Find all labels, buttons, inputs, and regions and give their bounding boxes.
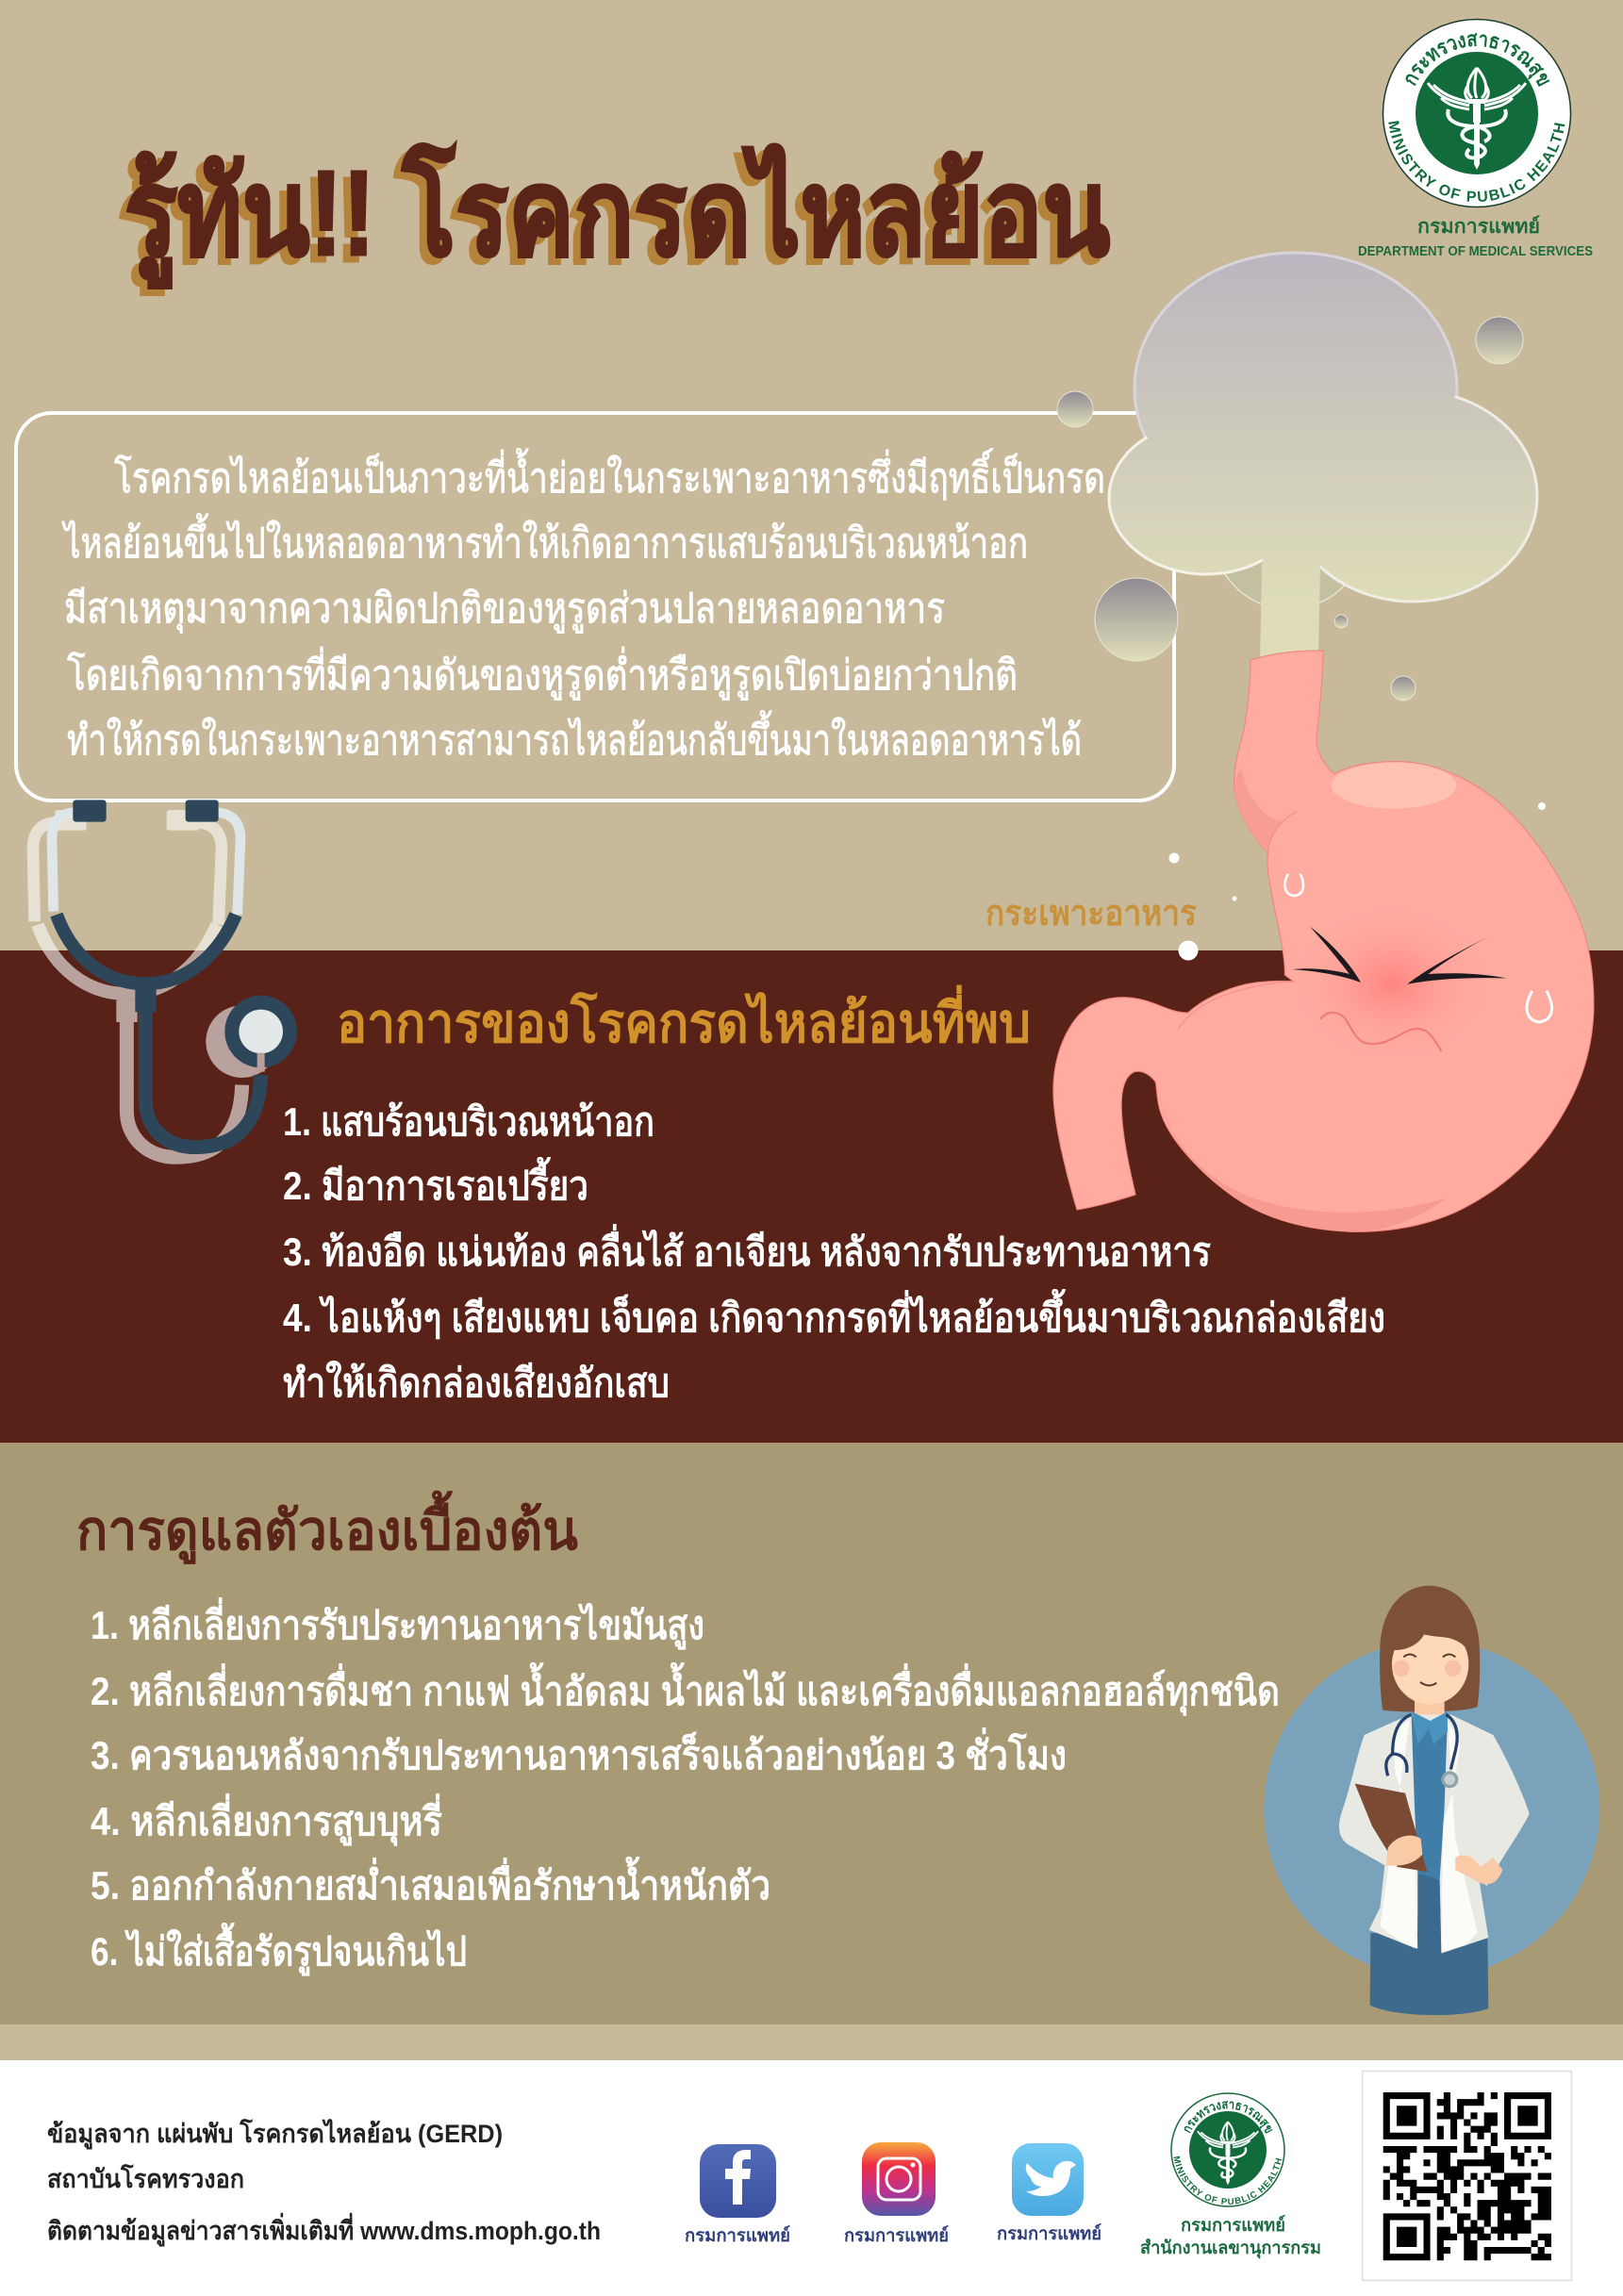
footer credits text: สถาบันโรคทรวงอก	[47, 2163, 244, 2193]
panel: intro text box	[16, 413, 1174, 801]
icon: stethoscope	[33, 800, 297, 1157]
self-care list: 4. หลีกเลี่ยงการสูบบุหรี่	[91, 1793, 442, 1846]
logo: ministry of public health	[1358, 19, 1593, 259]
intro paragraph	[62, 448, 1105, 764]
footer logo: ministry of public health: กระทรวงสาธารณสุข	[1184, 2101, 1273, 2134]
footer credits text: ข้อมูลจาก แผ่นพับ โรคกรดไหลย้อน (GERD)	[47, 2118, 503, 2150]
title: รู้ทัน!! โรคกรดไหลย้อน	[124, 142, 1110, 289]
icon: stomach character	[1053, 651, 1594, 1231]
doctor shirt	[1412, 1714, 1448, 1879]
symptoms list	[283, 1099, 1385, 1405]
band: footer background	[0, 2060, 1623, 2296]
doctor neck	[1415, 1688, 1445, 1723]
doctor skirt	[1370, 1933, 1488, 2015]
footer logo emblem	[1198, 2122, 1258, 2185]
self-care list: 3. ควรนอนหลังจากรับประทานอาหารเสร็จแล้วอย่างน้อย 3 ชั่วโมง	[91, 1727, 1067, 1777]
icon: doctor	[1264, 1586, 1599, 2015]
self-care list: 5. ออกกำลังกายสม่ำเสมอเพื่อรักษาน้ำหนักตัว	[91, 1856, 770, 1908]
symptoms list: 1. แสบร้อนบริเวณหน้าอก	[283, 1099, 654, 1144]
intro paragraph: โดยเกิดจากการที่มีความดันของหูรูดต่ำหรือหูรูดเปิดบ่อยกว่าปกติ	[67, 646, 1018, 701]
sweat drops	[1284, 874, 1303, 896]
self-care list: 1. หลีกเลี่ยงการรับประทานอาหารไขมันสูง	[91, 1597, 704, 1650]
stethoscope shadow	[33, 810, 278, 1157]
logo label thai: กรมการแพทย์	[1417, 215, 1540, 238]
icon: white dots	[1169, 802, 1546, 960]
symptoms list: ทำให้เกิดกล่องเสียงอักเสบ	[283, 1360, 670, 1405]
doctor collar	[1412, 1711, 1448, 1744]
doctor lapels	[1380, 1719, 1478, 1952]
icon: facebook	[685, 2144, 790, 2246]
footer logo: ministry of public health: สำนักงานเลขานุการกรม	[1140, 2238, 1321, 2259]
symptoms list: 2. มีอาการเรอเปรี้ยว	[283, 1156, 588, 1208]
stomach right eye	[1407, 933, 1507, 984]
footer logo: ministry of public health: MINISTRY OF PUBLIC HEALTH	[1173, 2156, 1283, 2205]
doctor stethoscope	[1386, 1714, 1457, 1787]
stomach label: กระเพาะอาหาร	[985, 894, 1198, 933]
self-care list: 6. ไม่ใส่เสื้อรัดรูปจนเกินไป	[91, 1922, 467, 1976]
doctor backdrop circle	[1264, 1641, 1599, 1976]
icon: twitter	[997, 2143, 1101, 2244]
intro paragraph: มีสาเหตุมาจากความผิดปกติของหูรูดส่วนปลายหลอดอาหาร	[64, 586, 945, 634]
stomach highlight	[1332, 762, 1456, 809]
doctor fringe	[1382, 1587, 1479, 1662]
title: รู้ทัน!! โรคกรดไหลย้อน	[117, 149, 1102, 295]
icon: stomach smoke cloud	[1109, 253, 1537, 665]
band: symptoms background	[0, 950, 1623, 1443]
self-care list	[91, 1597, 1280, 1976]
stomach mouth	[1320, 1013, 1442, 1051]
stomach left eye	[1292, 927, 1361, 983]
icon: instagram	[844, 2142, 949, 2246]
heading: symptoms: อาการของโรคกรดไหลย้อนที่พบ	[337, 984, 1031, 1054]
logo: ministry of public health: MINISTRY OF PUBLIC HEALTH	[1388, 121, 1565, 202]
facebook label: กรมการแพทย์	[685, 2225, 790, 2246]
footer credits text	[47, 2118, 601, 2247]
band: self-care background	[0, 1443, 1623, 2024]
doctor cheeks and smile	[1393, 1654, 1461, 1685]
symptoms list: 4. ไอแห้งๆ เสียงแหบ เจ็บคอ เกิดจากกรดที่ไหลย้อนขึ้นมาบริเวณกล่องเสียง	[283, 1288, 1385, 1340]
logo label english: DEPARTMENT OF MEDICAL SERVICES	[1358, 244, 1593, 259]
footer logo: ministry of public health	[1140, 2092, 1321, 2259]
instagram label: กรมการแพทย์	[844, 2225, 949, 2246]
doctor hands	[1386, 1836, 1502, 1884]
doctor hair back	[1380, 1586, 1480, 1712]
intro paragraph: ทำให้กรดในกระเพาะอาหารสามารถไหลย้อนกลับขึ้นมาในหลอดอาหารได้	[67, 710, 1082, 764]
heading: self care: การดูแลตัวเองเบื้องต้น	[76, 1491, 578, 1564]
symptoms list: 3. ท้องอืด แน่นท้อง คลื่นไส้ อาเจียน หลังจากรับประทานอาหาร	[283, 1224, 1211, 1274]
footer credits text: ติดตามข้อมูลข่าวสารเพิ่มเติมที่ www.dms.moph.go.th	[47, 2212, 601, 2247]
footer logo label: กรมการแพทย์	[1181, 2215, 1285, 2236]
doctor coat	[1339, 1714, 1530, 1954]
twitter label: กรมการแพทย์	[997, 2223, 1101, 2244]
icon: bubbles	[1057, 317, 1523, 701]
doctor face	[1392, 1624, 1468, 1705]
intro paragraph: ไหลย้อนขึ้นไปในหลอดอาหารทำให้เกิดอาการแสบร้อนบริเวณหน้าอก	[62, 513, 1028, 567]
logo: ministry of public health: กระทรวงสาธารณสุข	[1405, 33, 1550, 87]
stomach blush	[1286, 901, 1498, 1065]
QR code	[1362, 2071, 1571, 2280]
intro paragraph: โรคกรดไหลย้อนเป็นภาวะที่น้ำย่อยในกระเพาะอาหารซึ่งมีฤทธิ์เป็นกรด	[114, 448, 1105, 502]
doctor clipboard	[1355, 1784, 1427, 1872]
logo emblem	[1428, 68, 1526, 170]
self-care list: 2. หลีกเลี่ยงการดื่มชา กาแฟ น้ำอัดลม น้ำผลไม้ และเครื่องดื่มแอลกอฮอล์ทุกชนิด	[91, 1661, 1280, 1716]
